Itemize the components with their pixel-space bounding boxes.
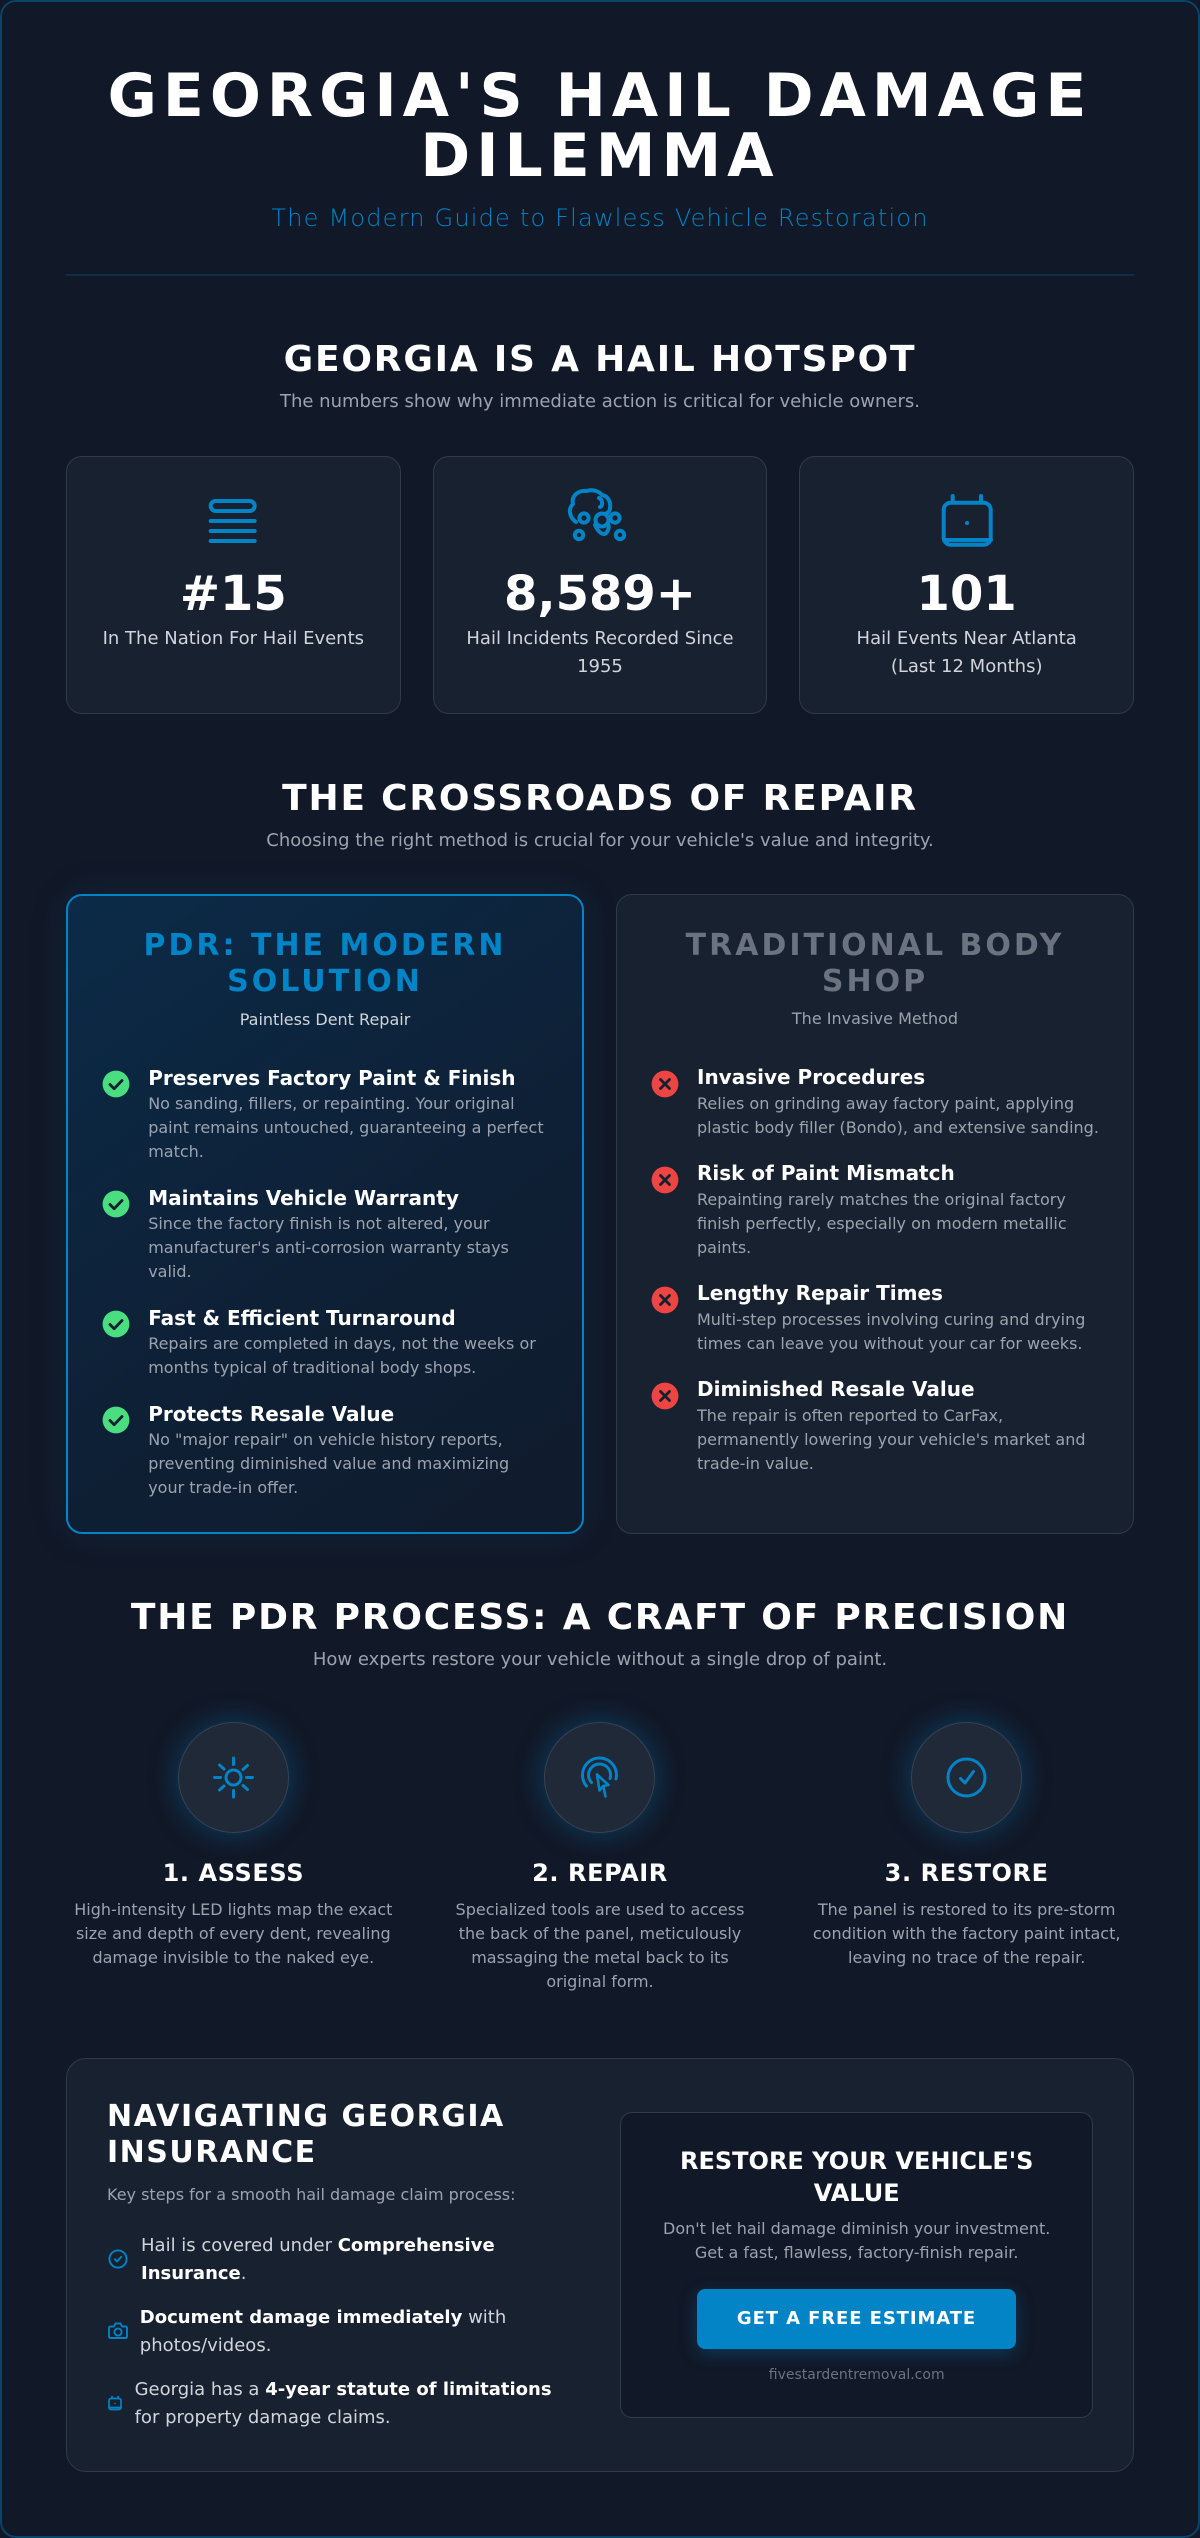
icon: check bbox=[102, 1310, 130, 1338]
step: repair bbox=[456, 1709, 744, 1990]
section: crossroads of repair bbox=[66, 778, 1134, 1534]
title bbox=[108, 61, 1092, 191]
step: assess bbox=[74, 1709, 392, 1966]
section: hail hotspot stats bbox=[66, 338, 1134, 714]
icon: cross bbox=[652, 1286, 678, 1314]
icon: check bbox=[102, 1406, 130, 1434]
section heading: THE CROSSROADS OF REPAIR bbox=[282, 778, 918, 818]
title: GEORGIA'S HAIL DAMAGE bbox=[108, 61, 1092, 131]
CTA text bbox=[621, 2217, 1092, 2265]
CTA button: GET A FREE ESTIMATE bbox=[737, 2308, 976, 2329]
benefit text: valid. bbox=[148, 1262, 192, 1281]
drawback: resale bbox=[652, 1377, 1086, 1472]
benefit text: preventing diminished value and maximizing bbox=[148, 1454, 509, 1473]
benefit title: Protects Resale Value bbox=[148, 1402, 394, 1426]
stat label bbox=[466, 628, 734, 677]
stat card: Atlanta events bbox=[799, 456, 1134, 714]
drawback: repair times bbox=[652, 1281, 1085, 1352]
CTA heading: RESTORE YOUR VEHICLE'S bbox=[680, 2147, 1033, 2175]
benefit: factory paint bbox=[102, 1066, 544, 1161]
step text: original form. bbox=[546, 1972, 654, 1990]
benefit title: Fast & Efficient Turnaround bbox=[148, 1306, 456, 1330]
icon: sun bbox=[178, 1722, 289, 1833]
panel title bbox=[144, 928, 506, 999]
icon: camera bbox=[106, 2319, 128, 2343]
drawback text bbox=[696, 1406, 1086, 1472]
drawback text bbox=[697, 1310, 1085, 1352]
panel: traditional body shop bbox=[616, 894, 1134, 1534]
icon: check bbox=[102, 1070, 130, 1098]
insurance step: comprehensive bbox=[107, 2232, 587, 2288]
drawback text: paints. bbox=[697, 1238, 751, 1256]
icon: calendar bbox=[107, 2394, 125, 2414]
stat number: 101 bbox=[917, 566, 1017, 622]
step text: for property damage claims. bbox=[135, 2406, 391, 2428]
step text: Insurance. bbox=[141, 2262, 246, 2284]
benefit text: paint remains untouched, guaranteeing a perfect bbox=[148, 1118, 544, 1137]
panel title: TRADITIONAL BODY bbox=[686, 928, 1064, 963]
panel title: PDR: THE MODERN bbox=[144, 928, 506, 963]
step text: leaving no trace of the repair. bbox=[848, 1948, 1085, 1966]
step text: size and depth of every dent, revealing bbox=[76, 1924, 391, 1942]
drawback: mismatch bbox=[652, 1161, 1067, 1256]
step title: 2. REPAIR bbox=[532, 1859, 668, 1887]
benefit text bbox=[148, 1094, 544, 1161]
section subheading: How experts restore your vehicle without a single drop of paint. bbox=[313, 1649, 887, 1670]
step text bbox=[140, 2304, 506, 2360]
step text: Hail is covered under Comprehensive bbox=[141, 2234, 495, 2256]
drawback text bbox=[697, 1190, 1067, 1256]
benefit: turnaround bbox=[102, 1306, 536, 1377]
benefit text: months typical of traditional body shops. bbox=[148, 1358, 476, 1377]
step text: the back of the panel, meticulously bbox=[459, 1924, 741, 1942]
stat label: 1955 bbox=[577, 656, 623, 677]
benefit text bbox=[148, 1430, 509, 1497]
drawback: invasive bbox=[652, 1065, 1099, 1136]
drawback title: Risk of Paint Mismatch bbox=[697, 1161, 955, 1185]
CTA text: Get a fast, flawless, factory-finish repair. bbox=[695, 2243, 1018, 2262]
benefit text bbox=[148, 1334, 536, 1377]
benefit title: Maintains Vehicle Warranty bbox=[148, 1186, 459, 1210]
step: restore bbox=[799, 1722, 1134, 1992]
stat label: Hail Events Near Atlanta bbox=[857, 628, 1077, 649]
drawback text: finish perfectly, especially on modern metallic bbox=[697, 1214, 1067, 1232]
panel subtitle: Paintless Dent Repair bbox=[240, 1010, 410, 1028]
CTA button bbox=[697, 2289, 1016, 2349]
step text: condition with the factory paint intact, bbox=[813, 1924, 1120, 1942]
icon: check bbox=[102, 1190, 130, 1218]
drawback text: trade-in value. bbox=[697, 1454, 814, 1472]
stat label: In The Nation For Hail Events bbox=[103, 628, 364, 649]
benefit text: manufacturer's anti-corrosion warranty stays bbox=[148, 1238, 509, 1257]
step title: 1. ASSESS bbox=[163, 1859, 304, 1887]
stat card: national rank bbox=[66, 456, 401, 714]
drawback text: Repainting rarely matches the original factory bbox=[697, 1190, 1066, 1208]
panel title: SOLUTION bbox=[227, 964, 423, 999]
drawback text bbox=[697, 1094, 1099, 1136]
step text bbox=[135, 2376, 552, 2432]
benefit text: your trade-in offer. bbox=[148, 1478, 298, 1497]
drawback text: Relies on grinding away factory paint, applying bbox=[697, 1094, 1074, 1112]
icon: cross bbox=[652, 1382, 678, 1410]
section heading: GEORGIA IS A HAIL HOTSPOT bbox=[284, 338, 916, 380]
benefit text: Since the factory finish is not altered, your bbox=[148, 1214, 490, 1233]
stat label: Hail Incidents Recorded Since bbox=[466, 628, 734, 649]
icon: pointer with arcs bbox=[544, 1722, 655, 1833]
drawback text: Multi-step processes involving curing and drying bbox=[697, 1310, 1085, 1328]
benefit text: Repairs are completed in days, not the weeks or bbox=[148, 1334, 536, 1353]
drawback text: The repair is often reported to CarFax, bbox=[697, 1406, 1003, 1424]
step text: photos/videos. bbox=[140, 2334, 271, 2356]
section subheading: The numbers show why immediate action is critical for vehicle owners. bbox=[280, 391, 920, 412]
insurance step: statute bbox=[107, 2376, 587, 2432]
drawback title: Diminished Resale Value bbox=[697, 1377, 975, 1401]
step title: 3. RESTORE bbox=[885, 1859, 1049, 1887]
step text: Georgia has a 4-year statute of limitations bbox=[135, 2378, 552, 2400]
step text: Document damage immediately with bbox=[140, 2306, 506, 2328]
benefit text bbox=[148, 1214, 509, 1281]
stat label bbox=[857, 628, 1077, 677]
panel: PDR bbox=[66, 894, 584, 1534]
stat number: 8,589+ bbox=[504, 566, 696, 622]
step text bbox=[456, 1900, 744, 1990]
section subheading: Choosing the right method is crucial for your vehicle's value and integrity. bbox=[266, 830, 934, 851]
stat number: #15 bbox=[180, 566, 287, 622]
icon: check circle bbox=[106, 2247, 130, 2271]
section heading: THE PDR PROCESS: A CRAFT OF PRECISION bbox=[131, 1597, 1069, 1638]
CTA text: Don't let hail damage diminish your investment. bbox=[663, 2219, 1050, 2238]
panel subtitle: The Invasive Method bbox=[792, 1008, 958, 1028]
step text: damage invisible to the naked eye. bbox=[92, 1948, 374, 1966]
drawback text: permanently lowering your vehicle's market and bbox=[697, 1430, 1086, 1448]
website: fivestardentremoval.com bbox=[769, 2367, 945, 2383]
section: PDR process bbox=[74, 1597, 1120, 1990]
benefit text: match. bbox=[148, 1142, 204, 1161]
CTA heading: VALUE bbox=[814, 2179, 900, 2207]
benefit text: No sanding, fillers, or repainting. Your original bbox=[148, 1094, 515, 1113]
insurance step: document bbox=[107, 2304, 587, 2360]
icon: cross bbox=[652, 1070, 678, 1098]
panel title: SHOP bbox=[822, 964, 928, 999]
drawback title: Lengthy Repair Times bbox=[697, 1281, 943, 1305]
step text bbox=[141, 2232, 495, 2288]
panel: insurance and call to action bbox=[66, 2058, 1134, 2472]
drawback title: Invasive Procedures bbox=[697, 1065, 925, 1089]
benefit text: No "major repair" on vehicle history reports, bbox=[148, 1430, 503, 1449]
stat label: (Last 12 Months) bbox=[891, 656, 1042, 677]
benefit: warranty bbox=[102, 1186, 509, 1281]
call to action box bbox=[620, 2112, 1093, 2418]
step text bbox=[74, 1900, 392, 1966]
icon: hail cloud bbox=[568, 488, 626, 542]
step text: Specialized tools are used to access bbox=[456, 1900, 744, 1918]
step text: The panel is restored to its pre-storm bbox=[818, 1900, 1115, 1918]
step text: High-intensity LED lights map the exact bbox=[74, 1900, 392, 1918]
step text bbox=[799, 1898, 1134, 1970]
insurance heading: NAVIGATING GEORGIA bbox=[107, 2099, 505, 2134]
drawback text: times can leave you without your car for weeks. bbox=[697, 1334, 1082, 1352]
subtitle: The Modern Guide to Flawless Vehicle Restoration bbox=[271, 204, 929, 232]
insurance heading bbox=[107, 2099, 505, 2171]
stat card: incidents bbox=[433, 456, 767, 714]
benefit title: Preserves Factory Paint & Finish bbox=[148, 1066, 515, 1090]
title: DILEMMA bbox=[420, 121, 780, 191]
insurance subheading: Key steps for a smooth hail damage claim process: bbox=[107, 2185, 516, 2204]
icon: cross bbox=[652, 1166, 678, 1194]
icon: stacked bars bbox=[208, 499, 257, 543]
header bbox=[66, 61, 1134, 276]
benefit: resale bbox=[102, 1402, 509, 1497]
CTA heading bbox=[621, 2145, 1092, 2209]
icon: check circle bbox=[911, 1722, 1022, 1833]
icon: calendar bbox=[942, 494, 993, 547]
step text: massaging the metal back to its bbox=[471, 1948, 729, 1966]
insurance heading: INSURANCE bbox=[107, 2135, 317, 2170]
drawback text: plastic body filler (Bondo), and extensive sanding. bbox=[697, 1118, 1099, 1136]
panel title bbox=[686, 928, 1064, 999]
